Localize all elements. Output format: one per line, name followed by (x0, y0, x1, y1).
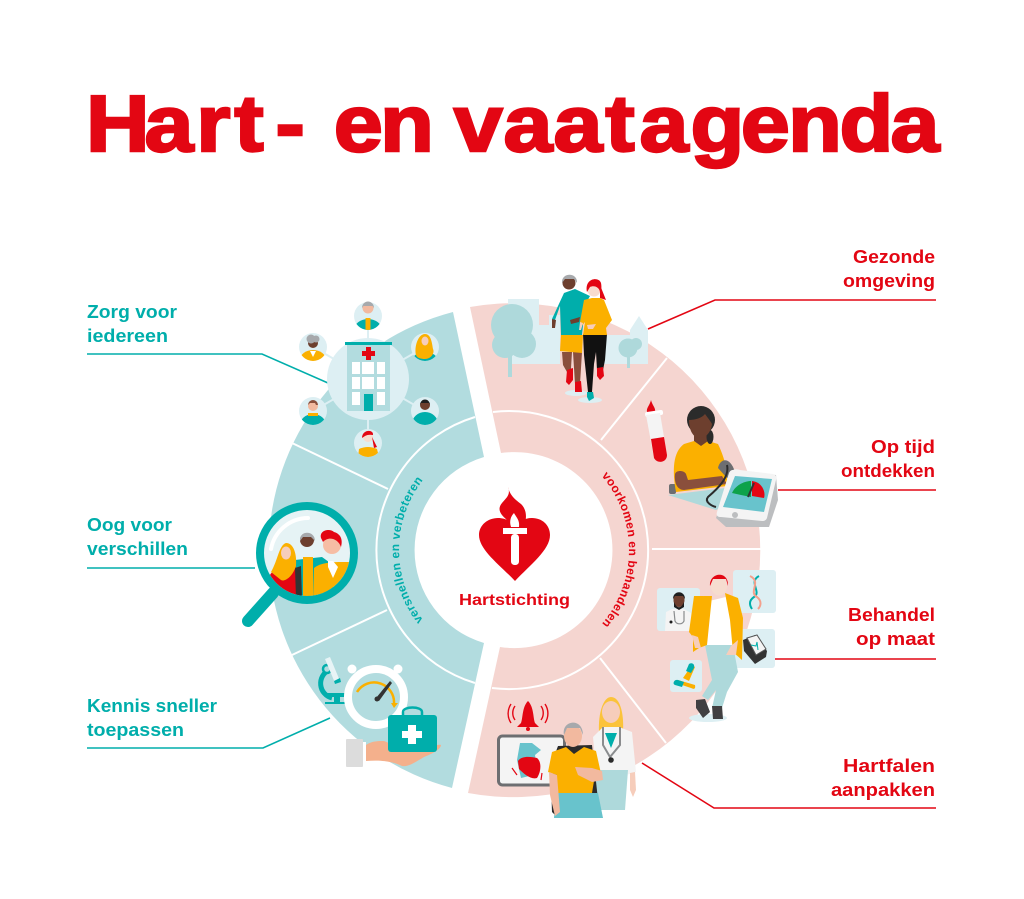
blood pressure monitor (716, 469, 778, 527)
panel: teal half ring (269, 312, 484, 788)
label: Oog voor verschillen: verschillen (87, 539, 188, 559)
illustration: magnifying glass with people (248, 506, 354, 621)
avatar: upper right (411, 333, 439, 361)
curved label: versnellen en verbeteren: versnellen en verbeteren (392, 478, 422, 624)
tile: pills (670, 660, 702, 692)
illustration: hospital network (299, 302, 439, 457)
illustration: runners in a healthy city (491, 275, 648, 403)
label: Kennis sneller toepassen (87, 696, 217, 740)
label: Op tijd ontdekken: Op tijd (871, 437, 935, 457)
avatar: lower left (299, 397, 327, 425)
illustration: microscope, stopwatch, first aid kit and hand (321, 657, 441, 767)
label: Oog voor verschillen: Oog voor (87, 515, 172, 535)
tile: smartwatch (735, 629, 775, 668)
logo: Hartstichting (459, 487, 570, 609)
leader lines teal (87, 354, 330, 748)
logo: Hartstichting: Hartstichting (459, 592, 570, 609)
label: Hartfalen aanpakken (831, 756, 935, 800)
label: Op tijd ontdekken: ontdekken (841, 461, 935, 481)
label: Zorg voor iedereen: iedereen (87, 326, 168, 346)
title: Hart- en vaatagenda (86, 79, 941, 168)
label: Hartfalen aanpakken: Hartfalen (843, 756, 935, 776)
shadows (565, 390, 587, 396)
doctor (593, 697, 636, 810)
man standing (689, 575, 743, 722)
woman runner (579, 279, 612, 401)
label: Oog voor verschillen (87, 515, 188, 559)
hand (346, 739, 441, 767)
label: Behandel op maat: op maat (856, 629, 935, 649)
label: Kennis sneller toepassen: Kennis sneller (87, 696, 217, 716)
label: Gezonde omgeving: Gezonde (853, 247, 935, 267)
illustration: blood test tube (645, 400, 667, 462)
microscope (321, 657, 348, 704)
illustration: personalized treatment (657, 570, 776, 722)
illustration: woman with blood pressure monitor (668, 406, 778, 527)
label: Hartfalen aanpakken: aanpakken (831, 780, 935, 800)
leader lines red (642, 300, 936, 808)
first aid kit (388, 708, 437, 752)
avatar: bottom (354, 429, 382, 457)
man runner (552, 275, 590, 392)
curved label: voorkomen en behandelen: voorkomen en behandelen (602, 472, 638, 626)
panel: pink half ring (468, 303, 761, 797)
tile: DNA (733, 570, 776, 613)
illustration: heart failure patient and doctor (498, 697, 636, 818)
label: Behandel op maat: Behandel (848, 605, 935, 625)
avatar: top (354, 302, 382, 330)
avatar: upper left (299, 333, 327, 361)
large tree (491, 304, 536, 377)
label: Kennis sneller toepassen: toepassen (87, 720, 184, 740)
avatar: lower right (411, 397, 439, 425)
label: Gezonde omgeving (843, 247, 935, 291)
stopwatch (348, 664, 404, 725)
label: Behandel op maat (848, 605, 935, 649)
city background (508, 299, 648, 364)
small tree (618, 338, 642, 368)
label: Zorg voor iedereen (87, 302, 177, 346)
alarm bell (508, 701, 548, 731)
label: Gezonde omgeving: omgeving (843, 271, 935, 291)
patient in chair (548, 723, 603, 818)
monitor with heart (498, 736, 564, 785)
label: Zorg voor iedereen: Zorg voor (87, 302, 177, 322)
tile: doctor (657, 588, 700, 631)
label: Op tijd ontdekken (841, 437, 935, 481)
